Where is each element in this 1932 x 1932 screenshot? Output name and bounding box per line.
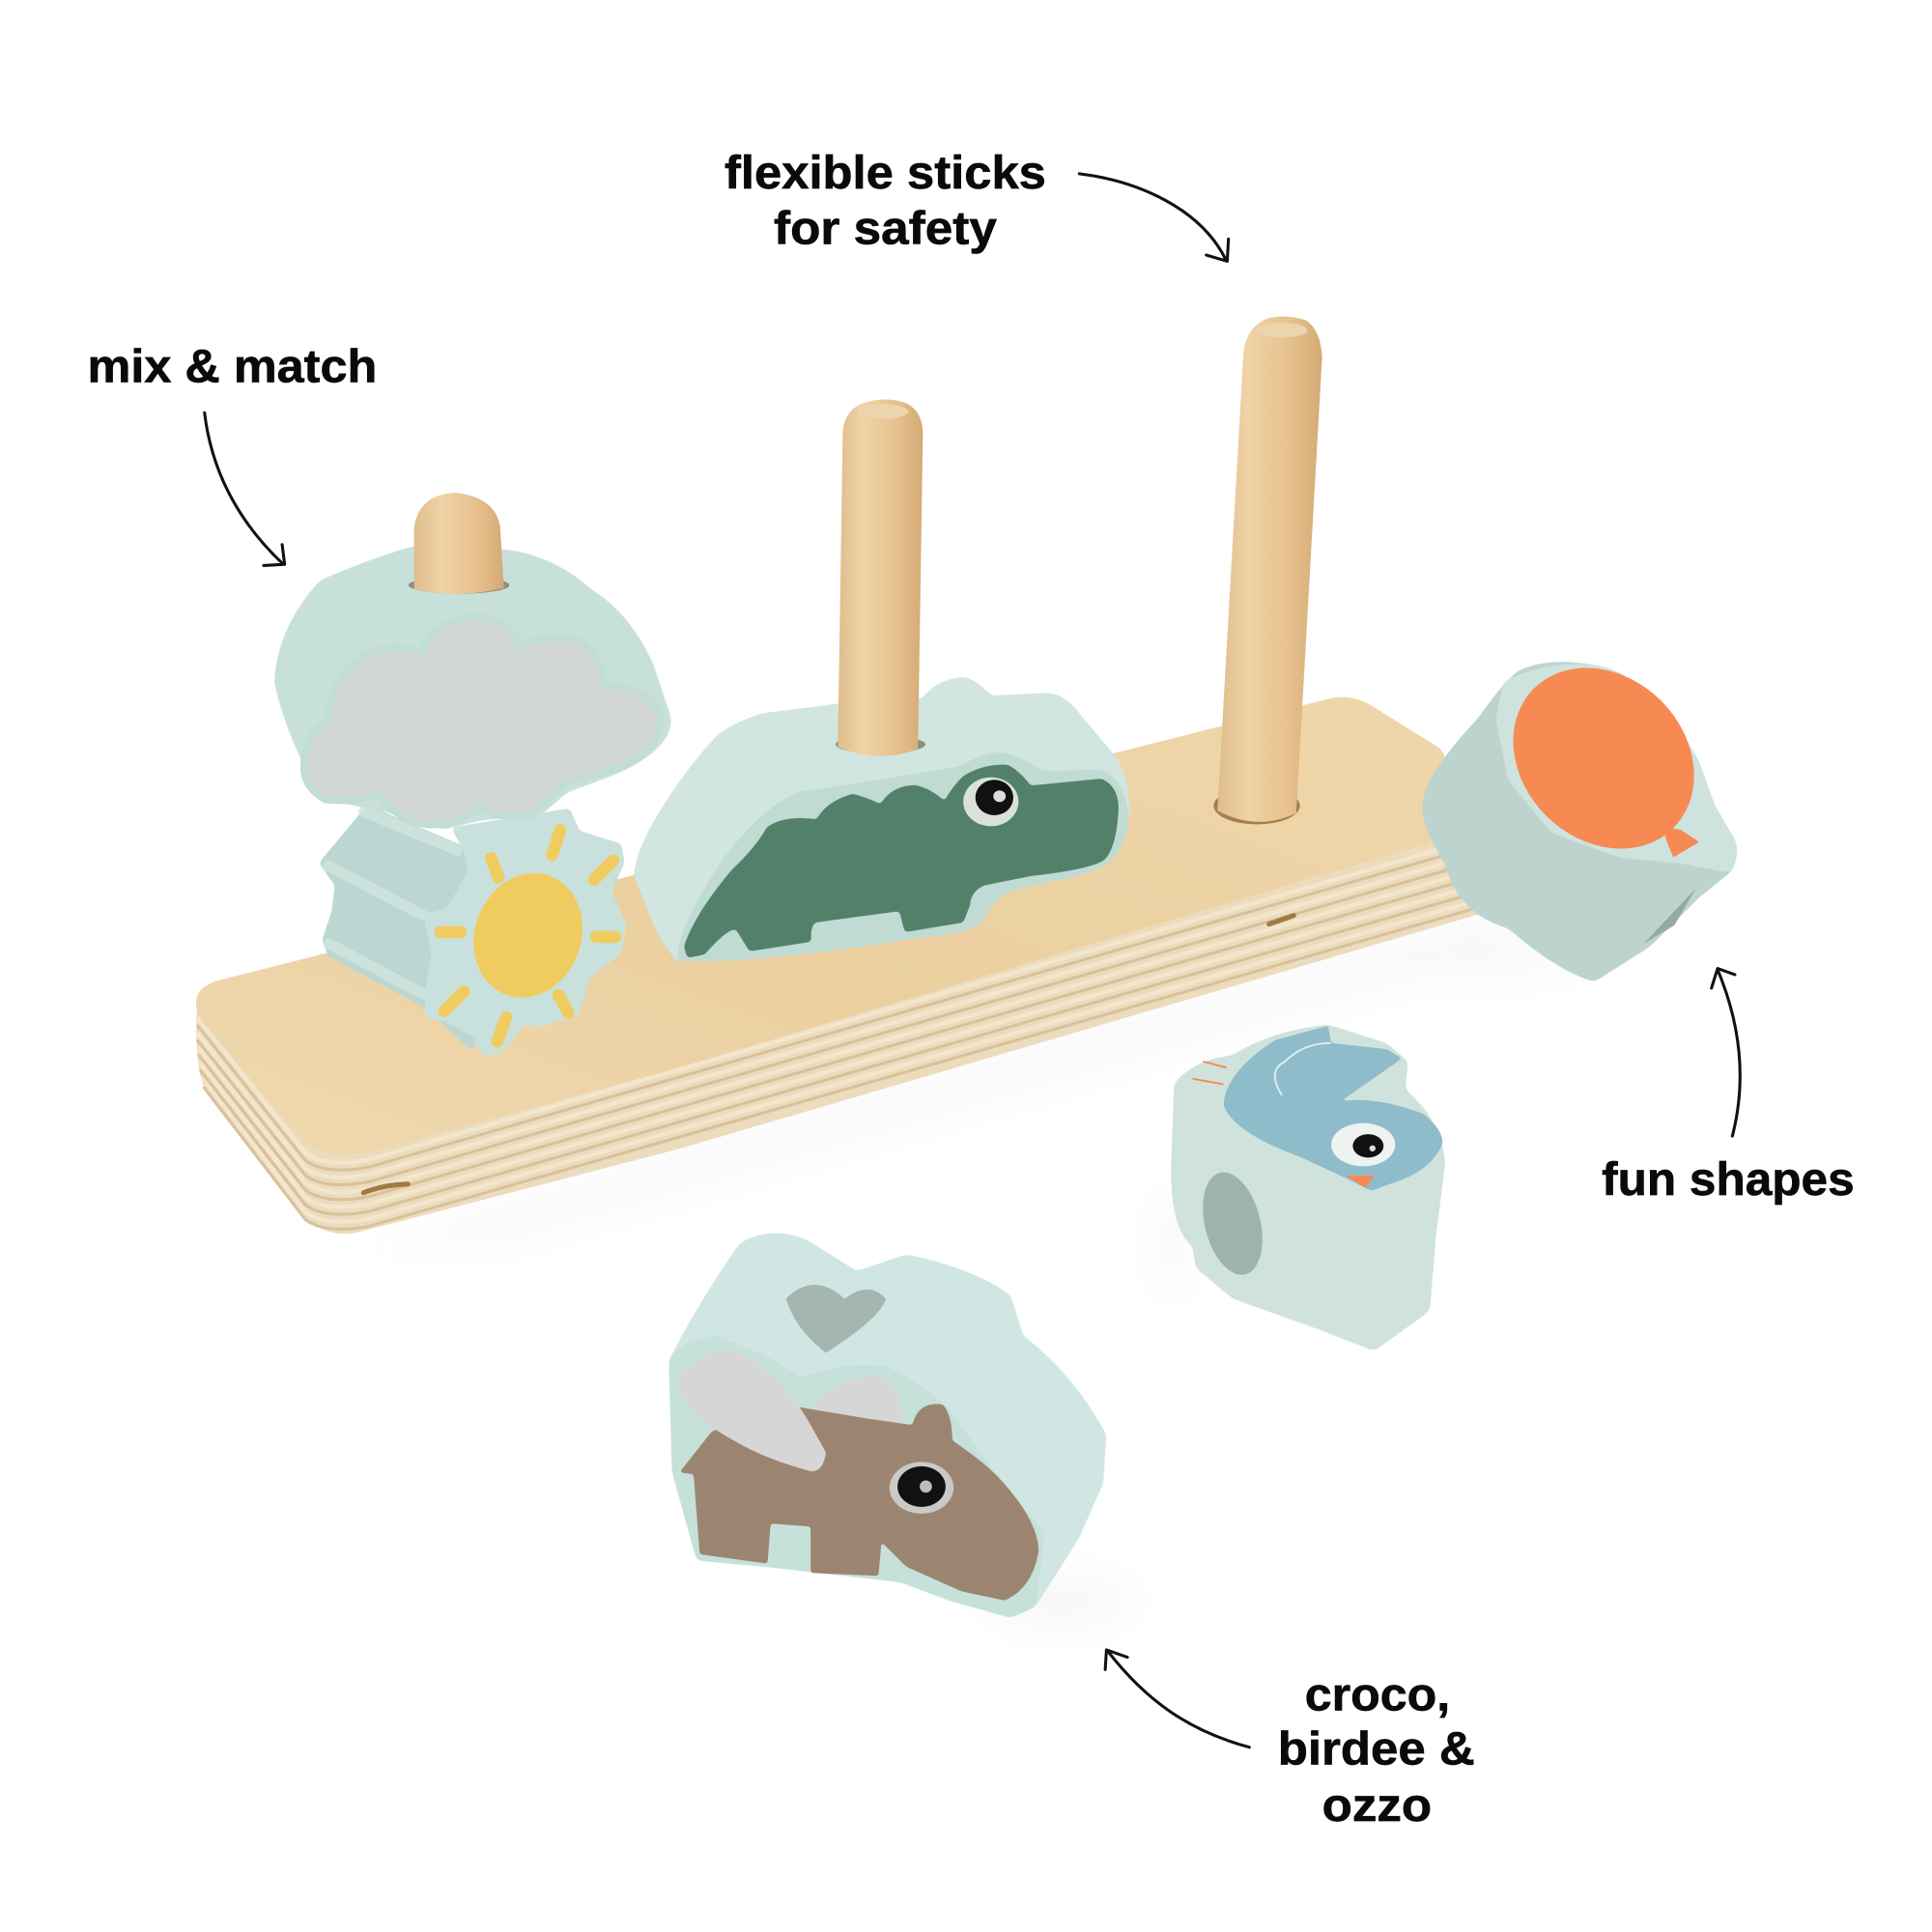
arrow: croco <box>1105 1650 1249 1747</box>
arrow: flexible sticks <box>1079 174 1229 261</box>
sun gear face <box>423 809 626 1056</box>
ozzo piece <box>668 1234 1106 1618</box>
ozzo rim <box>668 1336 1045 1618</box>
cloud piece <box>274 493 671 830</box>
sun side body <box>319 805 496 1053</box>
label: flexible sticks for safety <box>724 147 1046 255</box>
board top face <box>196 697 1445 1154</box>
cloud top surface <box>274 547 671 830</box>
ozzo large ear <box>677 1350 826 1471</box>
bird and ozzo pieces <box>668 1025 1445 1618</box>
sun piece <box>319 805 626 1056</box>
balloon body <box>1422 662 1737 981</box>
sun rays <box>440 830 615 1041</box>
crocodile piece <box>634 677 1129 961</box>
arrow: fun shapes <box>1712 969 1740 1136</box>
ozzo small ear <box>810 1376 903 1425</box>
arrow: mix & match <box>205 412 285 565</box>
bird blue face <box>1223 1026 1442 1191</box>
bird wing line <box>1275 1043 1331 1095</box>
soft ground shadows <box>370 918 1589 1629</box>
label: fun shapes: fun shapes <box>1602 1153 1855 1206</box>
croc green face <box>684 764 1119 958</box>
bird body <box>1171 1025 1445 1351</box>
bird piece <box>1171 1025 1445 1351</box>
label: croco, birdee & ozzo: ozzo <box>1322 1779 1432 1832</box>
ozzo heart hole <box>786 1285 886 1353</box>
croc face rim <box>677 752 1129 961</box>
balloon hole <box>1644 889 1696 944</box>
bird hole <box>1193 1166 1272 1281</box>
cloud hole <box>409 577 509 594</box>
label: croco, birdee & ozzo: croco, <box>1305 1668 1450 1720</box>
croc body <box>634 677 1129 961</box>
peg hole right <box>1213 787 1300 824</box>
label: mix & match: mix & match <box>88 340 377 392</box>
label: croco, birdee & ozzo <box>1278 1668 1475 1832</box>
balloon face rim <box>1495 664 1737 873</box>
sun disc <box>456 858 600 1013</box>
balloon piece <box>1422 631 1737 981</box>
board knots <box>363 916 1293 1193</box>
balloon orange <box>1476 631 1731 886</box>
bird eye <box>1331 1123 1395 1166</box>
label: flexible sticks for safety: flexible sticks <box>724 147 1046 199</box>
bird beak <box>1346 1176 1375 1188</box>
ozzo brown body <box>679 1404 1038 1601</box>
board side and front <box>196 739 1479 1234</box>
cloud front rim and face <box>307 620 656 821</box>
short wooden peg <box>414 493 504 594</box>
wooden base board <box>196 697 1479 1234</box>
ozzo eye <box>890 1462 953 1514</box>
croc hole <box>836 735 925 753</box>
right wooden peg <box>1217 317 1322 822</box>
middle wooden peg <box>838 400 923 756</box>
plywood layers <box>197 841 1476 1229</box>
croc eye <box>963 778 1018 826</box>
label: croco, birdee & ozzo: birdee & <box>1278 1723 1475 1776</box>
sun side ridges <box>328 811 457 995</box>
label: flexible sticks for safety: for safety <box>774 203 997 255</box>
ozzo body <box>668 1234 1106 1618</box>
bird tail lines <box>1193 1062 1227 1084</box>
